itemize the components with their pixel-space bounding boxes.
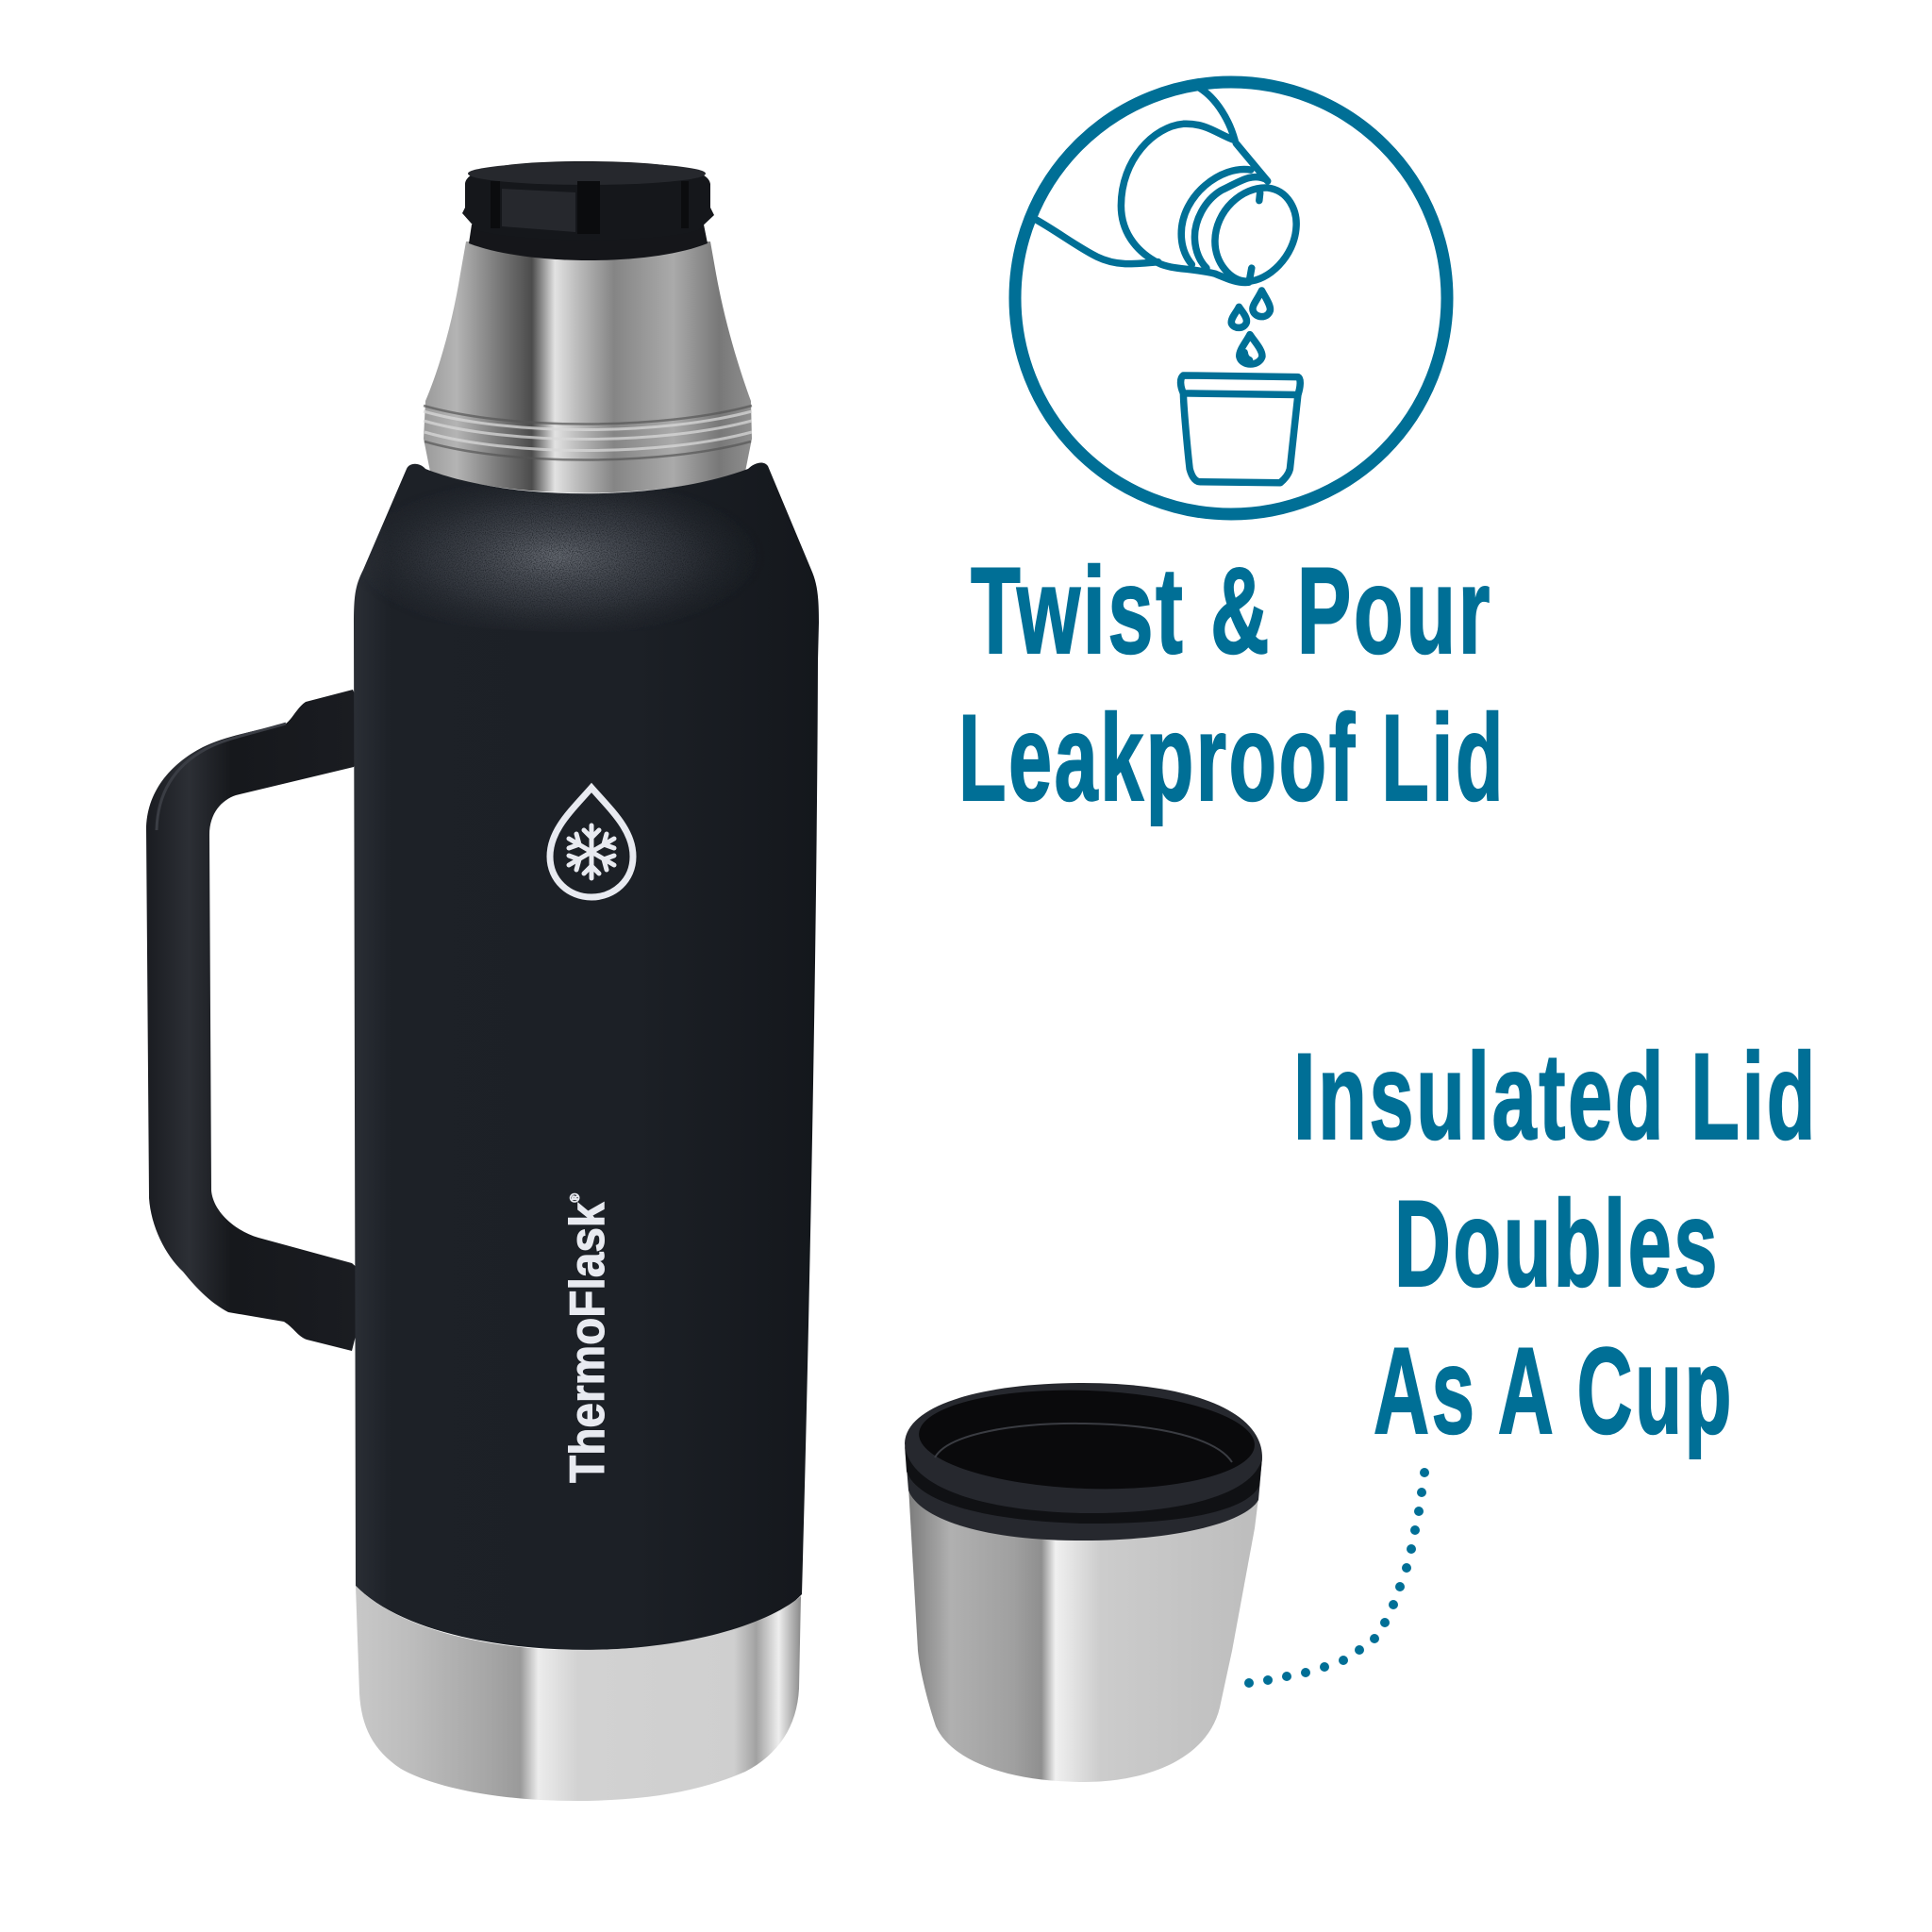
bottle steel base [356,1586,801,1801]
icon: droplet with snowflake logo [550,788,633,897]
heading: insulated lid doubles as a cup [1293,1027,1818,1459]
cup steel body [908,1486,1258,1782]
heading: twist and pour leakproof lid: Leakproof Lid [958,689,1506,826]
heading: twist and pour leakproof lid: Twist & Pour [971,541,1492,679]
thermos bottle [146,161,819,1801]
heading: insulated lid doubles as a cup: As A Cup [1374,1322,1734,1459]
cup dark rim [905,1383,1262,1541]
bottle cap [462,161,714,240]
bottle handle [146,690,359,1351]
arrow: dotted line from text to cup [1244,1468,1429,1688]
cup rim edge [905,1445,1262,1524]
bottle neck steel [424,225,752,492]
heading: insulated lid doubles as a cup: Doubles [1394,1174,1720,1312]
brand name text: ThermoFlask [560,1177,615,1483]
cup inner ledge [935,1424,1232,1462]
heading: twist and pour leakproof lid [958,541,1506,826]
icon detail: hand, bottle and pouring drops [1034,87,1300,483]
cup opening [917,1385,1257,1494]
insulated cup lid [905,1383,1262,1782]
brand name text: ® [567,1192,582,1202]
icon: twist and pour lid in circle [1015,82,1447,514]
bottle body [344,462,819,1650]
